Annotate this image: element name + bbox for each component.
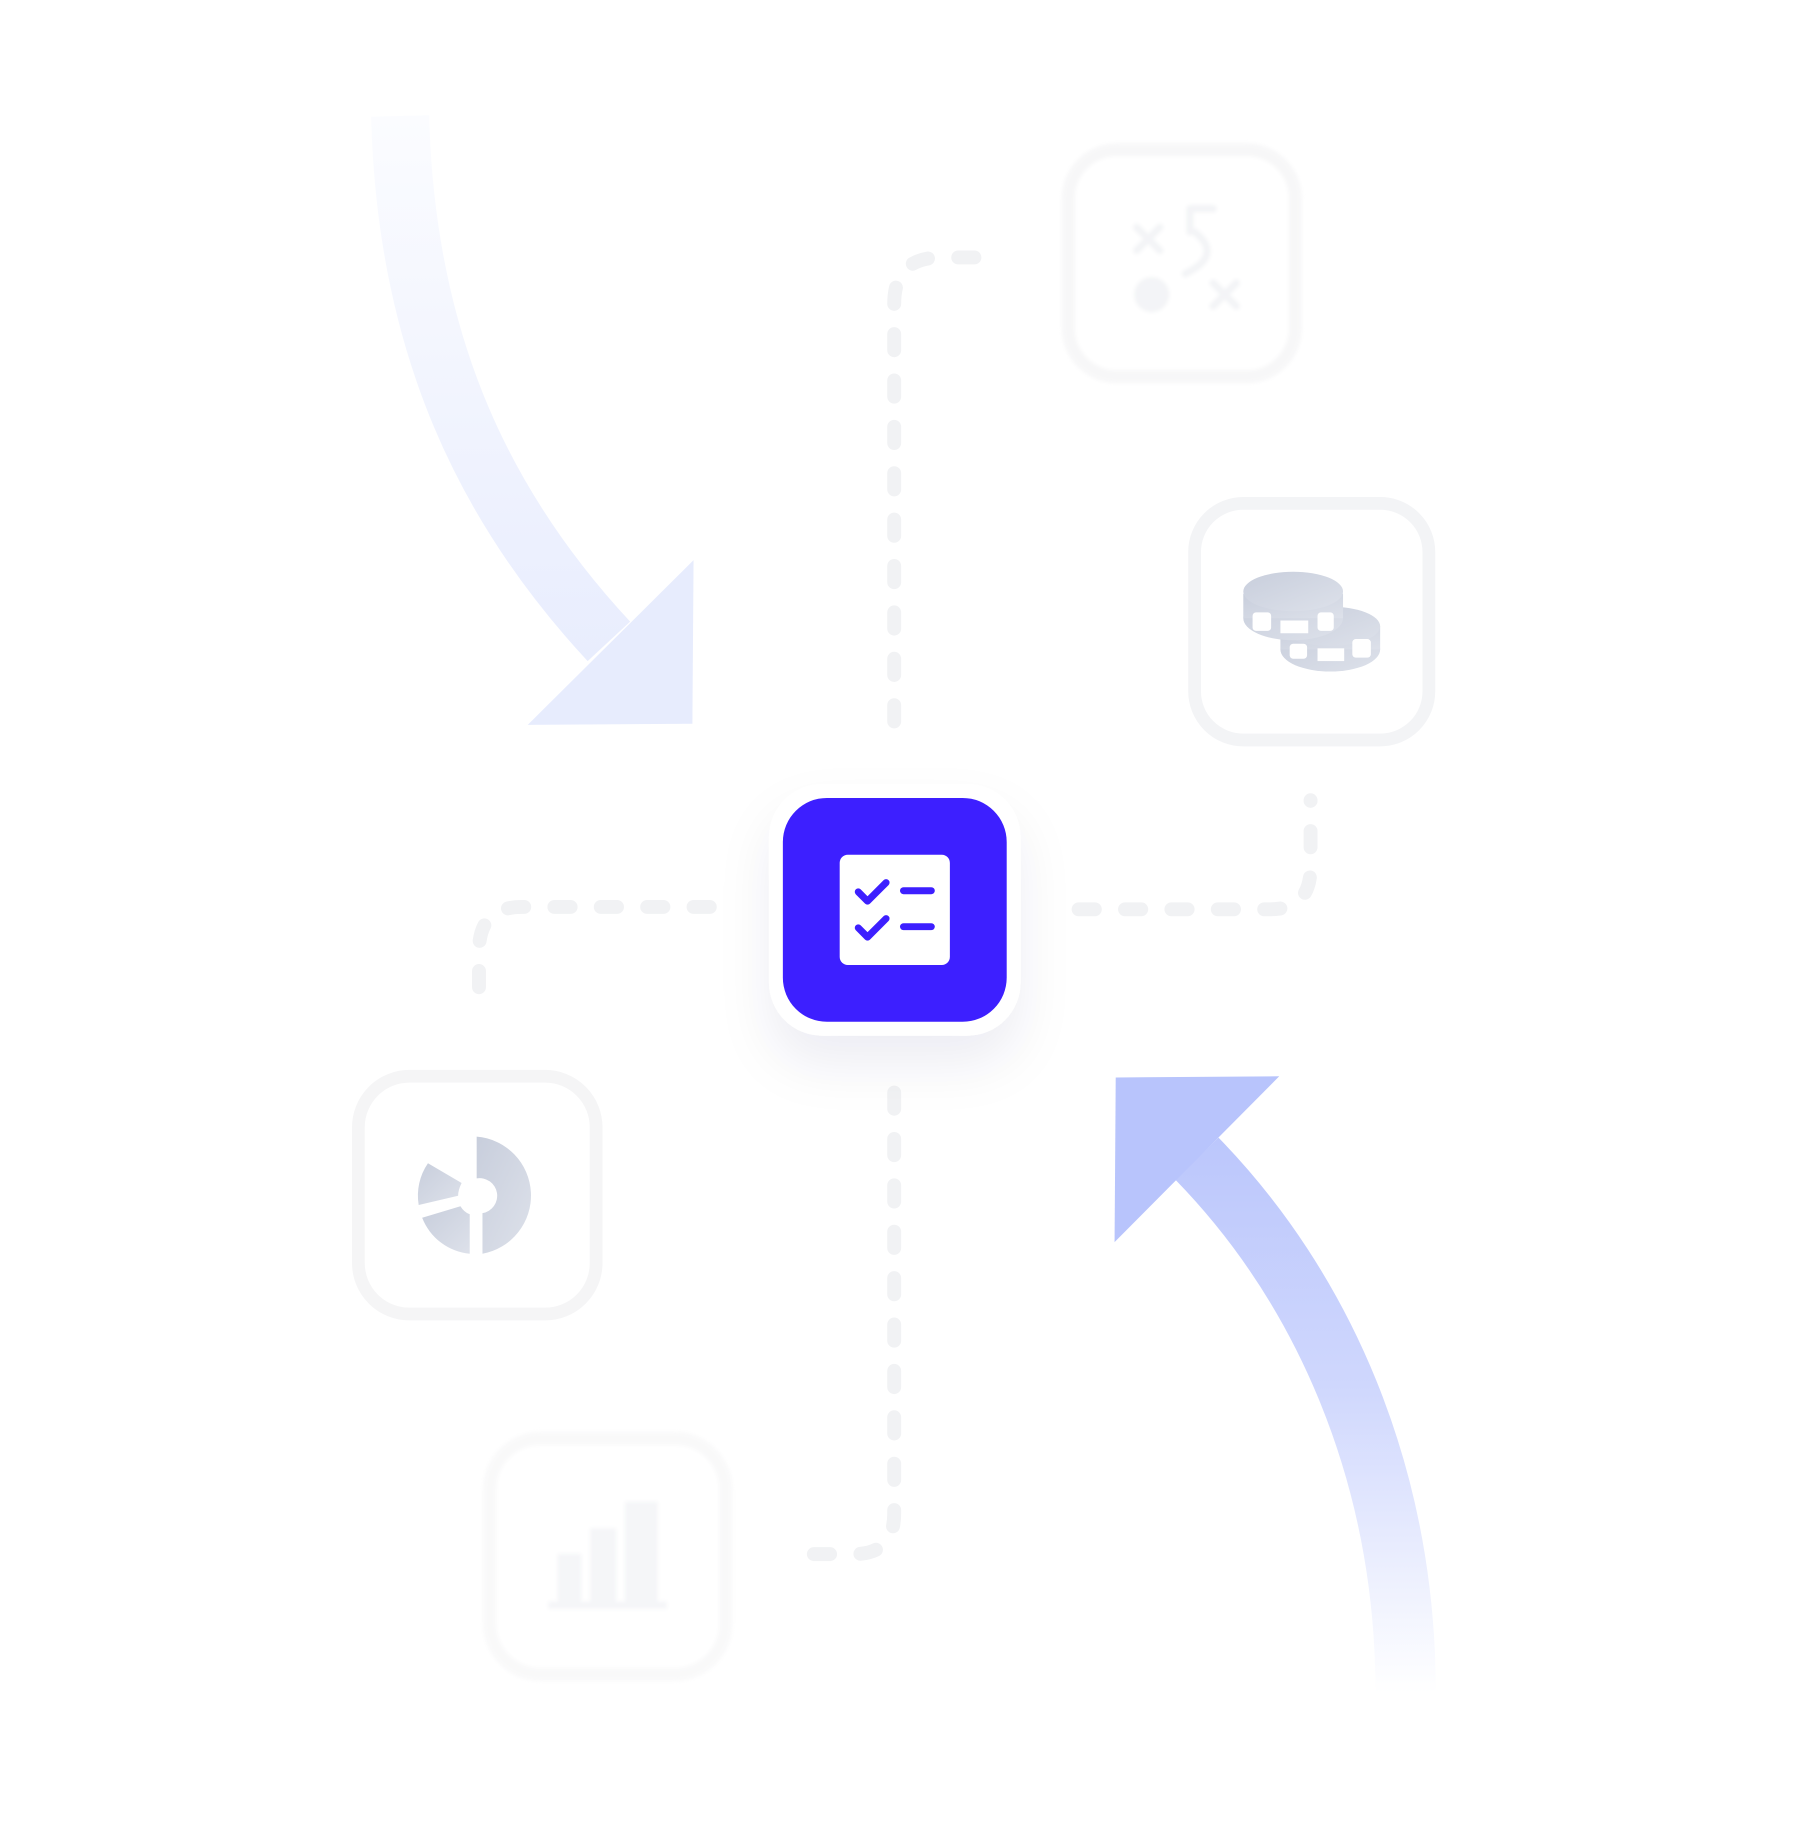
center icon: checklist (769, 784, 1021, 1036)
box: pie chart (358, 1076, 596, 1314)
dashed connectors (479, 257, 1311, 1554)
box: tactics (faded) (1068, 150, 1295, 377)
arrow: top-left (400, 116, 694, 725)
box: bar chart (faded) (489, 1438, 726, 1675)
icon: coins (1243, 572, 1380, 672)
arrow: bottom-right (1115, 1076, 1406, 1693)
icon: donut (418, 1137, 531, 1254)
box: coins (1195, 503, 1429, 740)
